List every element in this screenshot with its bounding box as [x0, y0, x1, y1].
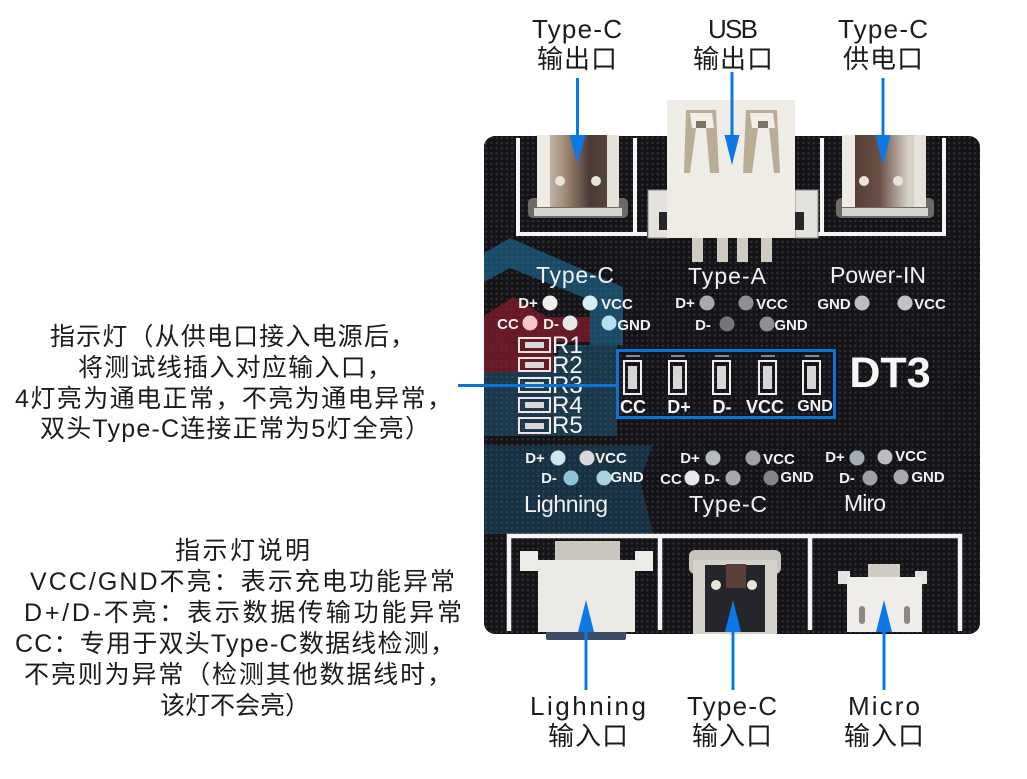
- text block: indicator light note: 将测试线插入对应输入口，: [78, 354, 392, 382]
- pads: Power-IN: [817, 296, 946, 313]
- text block: indicator light note: [15, 323, 452, 443]
- arrow: Type-C input: [725, 600, 741, 690]
- label: Lightning input: Lighning: [530, 691, 646, 721]
- panel: circuit board: [484, 100, 980, 640]
- text block: indicator light note: 双头Type-C连接正常为5灯全亮）: [40, 415, 430, 443]
- pads: Type-A: D-: [695, 317, 711, 334]
- callout line to LED note: [458, 384, 618, 387]
- LED indicators: D-: [712, 397, 732, 417]
- pads: Power-IN: VCC: [914, 296, 946, 313]
- arrow: Micro input: [876, 600, 892, 690]
- pads: Micro input: VCC: [895, 448, 927, 465]
- pads: Type-C output: VCC: [601, 296, 633, 313]
- text block: indicator light description: [15, 537, 462, 720]
- label: Micro input: Micro: [848, 691, 920, 721]
- pads: Micro input: D-: [839, 470, 855, 487]
- label: Power-IN silk: Power-IN: [830, 262, 926, 288]
- resistors R1 to R5: R4: [552, 392, 583, 419]
- LED indicators: [620, 355, 833, 417]
- text block: indicator light description: 该灯不会亮）: [160, 692, 310, 720]
- frame: top left connector: [518, 138, 647, 234]
- arrow: Type-C output: [570, 78, 586, 163]
- text block: indicator light description: D+/D-不亮：表示数据传输功能异常: [24, 599, 462, 627]
- connector: Type-C input: [689, 550, 781, 634]
- pads: Type-C input: [660, 450, 814, 488]
- text block: indicator light note: 指示灯（从供电口接入电源后，: [50, 323, 415, 351]
- pads: Micro input: GND: [911, 469, 945, 486]
- label: USB output: [693, 14, 773, 74]
- pads: Type-C output: GND: [617, 317, 651, 334]
- label: Type-C power: 供电口: [843, 44, 923, 74]
- label: Type-C power: Type-C: [838, 14, 928, 44]
- pads: Lightning: VCC: [595, 450, 627, 467]
- pads: Lightning: D+: [525, 450, 545, 467]
- pads: Type-C input: D-: [704, 471, 720, 488]
- label: Type-C output: Type-C: [532, 14, 622, 44]
- pads: Type-C input: GND: [780, 469, 814, 486]
- text block: indicator light description: 不亮则为异常（检测其他数据线时，: [24, 661, 452, 689]
- pads: Type-C output: D-: [543, 316, 559, 333]
- label: Type-C silk: Type-C: [536, 262, 614, 288]
- resistors R1 to R5: R1: [552, 332, 583, 359]
- label: USB output: USB: [708, 14, 758, 44]
- pads: Lightning: [525, 450, 644, 487]
- label: Type-A silk: Type-A: [688, 263, 767, 289]
- pads: Type-A: D+: [675, 295, 695, 312]
- connector: Micro input: [838, 564, 927, 632]
- label: USB output: 输出口: [693, 44, 773, 74]
- text block: indicator light description: VCC/GND不亮：表示充电功能异常: [30, 568, 455, 596]
- label: Type-C output: [532, 14, 622, 74]
- pads: Type-C output: CC: [497, 316, 519, 333]
- model name DT3: DT3: [849, 349, 931, 397]
- pads: Power-IN: GND: [817, 296, 851, 313]
- pads: Micro input: D+: [825, 449, 845, 466]
- label: Micro input: [844, 691, 924, 751]
- label: Type-C input silk: Type-C: [689, 491, 767, 517]
- resistors R1 to R5: R2: [552, 352, 583, 379]
- pads: Type-A: GND: [774, 317, 808, 334]
- pads: Type-C input: VCC: [763, 451, 795, 468]
- connector: Type-C output: [528, 135, 628, 218]
- arrow: Lightning input: [578, 600, 594, 690]
- LED indicators: D+: [667, 397, 691, 417]
- pads: Type-C input: D+: [680, 450, 700, 467]
- pads: Type-C output: [497, 295, 651, 334]
- pads: Type-C input: CC: [660, 471, 682, 488]
- LED indicators: GND: [797, 398, 833, 415]
- pads: Type-A: VCC: [756, 296, 788, 313]
- connector: USB output: [648, 100, 818, 262]
- resistors R1 to R5: [519, 332, 583, 439]
- frame: top right connector: [818, 138, 944, 234]
- label: Lightning input: [530, 691, 646, 751]
- pads: Lightning: D-: [541, 470, 557, 487]
- label: Type-C input: [687, 691, 777, 751]
- label: Type-C input: 输入口: [692, 721, 772, 751]
- text block: indicator light description: CC：专用于双头Type-C数据线检测，: [15, 630, 455, 658]
- resistors R1 to R5: R5: [552, 412, 583, 439]
- arrow: USB output: [724, 72, 740, 165]
- connector: Type-C power input: [836, 135, 934, 218]
- pads: Lightning: GND: [610, 469, 644, 486]
- pads: Type-A: [675, 295, 808, 334]
- text block: indicator light description: 指示灯说明: [175, 537, 310, 565]
- connector: Lightning input: [520, 541, 653, 640]
- watermark logo: [484, 238, 653, 534]
- LED indicators: CC: [620, 397, 646, 417]
- pads: Micro input: [825, 448, 945, 487]
- resistors R1 to R5: R3: [552, 372, 583, 399]
- label: Miro silk: Miro: [844, 490, 886, 516]
- arrow: Type-C power: [876, 78, 890, 165]
- label: Type-C output: 输出口: [537, 44, 617, 74]
- label: Type-C input: Type-C: [687, 691, 777, 721]
- pads: Type-C output: D+: [518, 295, 538, 312]
- text block: indicator light note: 4灯亮为通电正常，不亮为通电异常，: [15, 385, 452, 413]
- LED indicators: VCC: [746, 397, 784, 417]
- label: Micro input: 输入口: [844, 721, 924, 751]
- callout box: LED indicators: [618, 350, 834, 418]
- label: Type-C power: [838, 14, 928, 74]
- label: Lightning silk: Lighning: [524, 491, 608, 517]
- label: Lightning input: 输入口: [548, 721, 628, 751]
- frame: bottom connectors: [509, 536, 960, 631]
